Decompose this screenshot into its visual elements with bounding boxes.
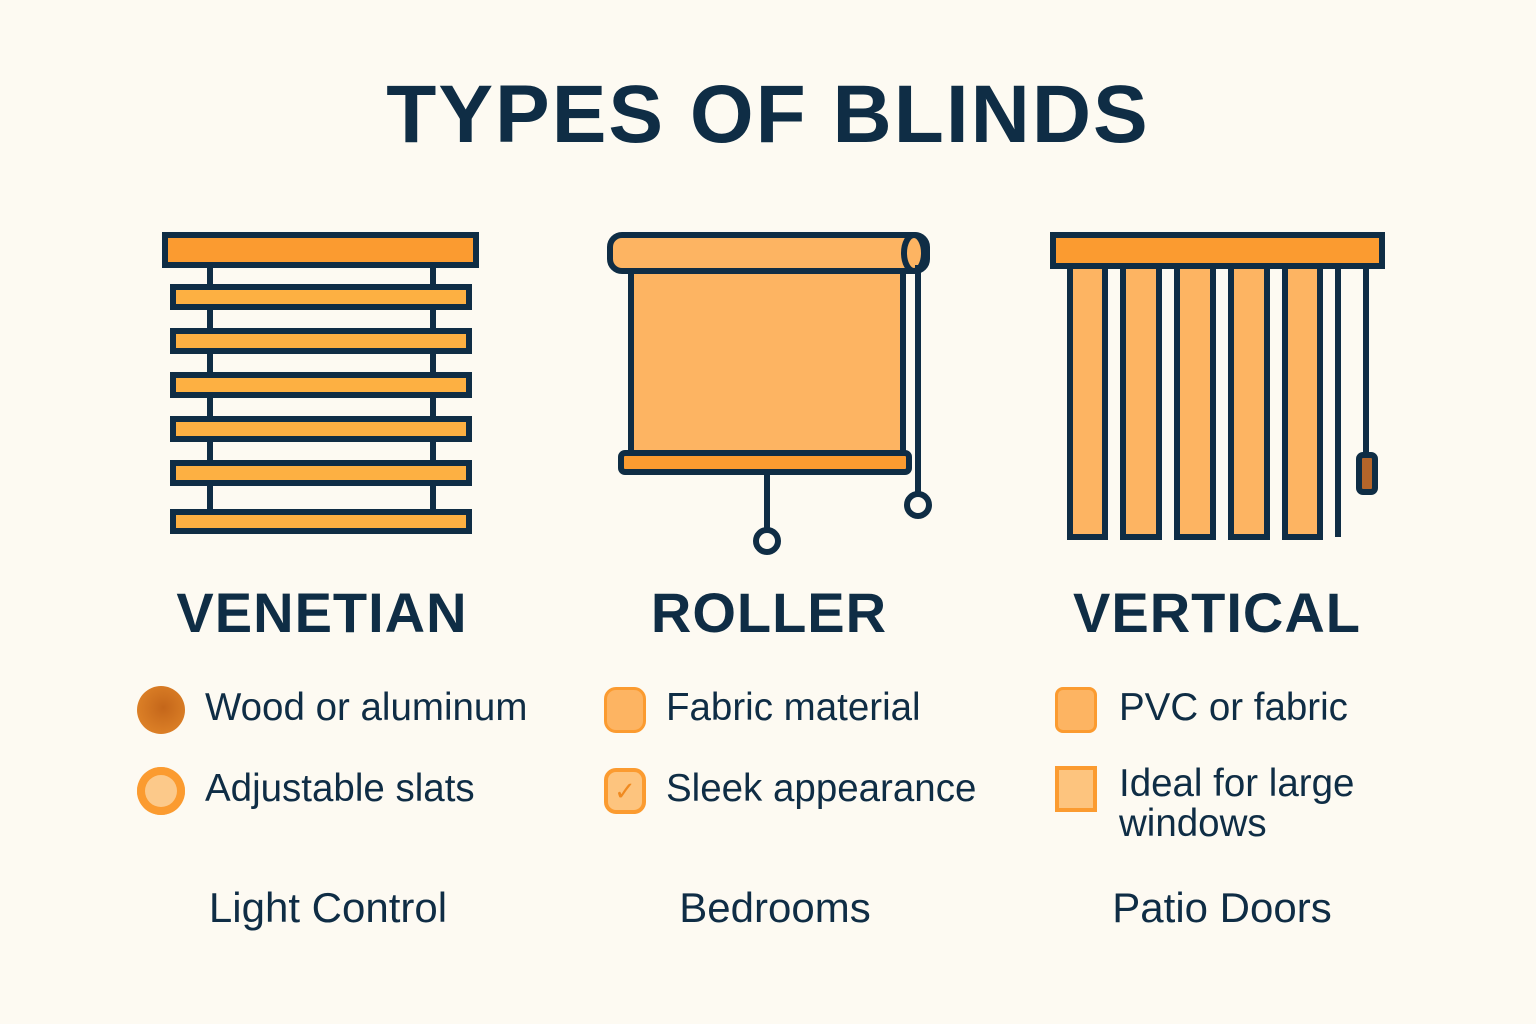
- heading: venetian: VENETIAN: [176, 581, 468, 644]
- label: light control: Light Control: [209, 884, 447, 931]
- icon: vertical blind: [1053, 235, 1382, 537]
- item: pvc: PVC or fabric: [1119, 686, 1348, 729]
- title: TYPES OF BLINDS: [386, 69, 1150, 160]
- item: slats: Adjustable slats: [205, 767, 475, 810]
- item: fabric: Fabric material: [666, 686, 921, 729]
- icon: roller blind: [610, 235, 929, 552]
- item: large windows: [1055, 762, 1354, 845]
- heading: roller: ROLLER: [651, 581, 887, 644]
- item: wood: Wood or aluminum: [205, 686, 527, 729]
- item: large windows: windows: [1119, 802, 1267, 845]
- heading: vertical: VERTICAL: [1073, 581, 1361, 644]
- item: sleek: ✓: [614, 776, 636, 806]
- label: patio doors: Patio Doors: [1112, 884, 1332, 931]
- icon: venetian blind: [165, 235, 476, 531]
- item: large windows: Ideal for large: [1119, 762, 1354, 805]
- illustrations: [162, 232, 1385, 555]
- label: bedrooms: Bedrooms: [679, 884, 871, 931]
- item: sleek: Sleek appearance: [666, 767, 976, 810]
